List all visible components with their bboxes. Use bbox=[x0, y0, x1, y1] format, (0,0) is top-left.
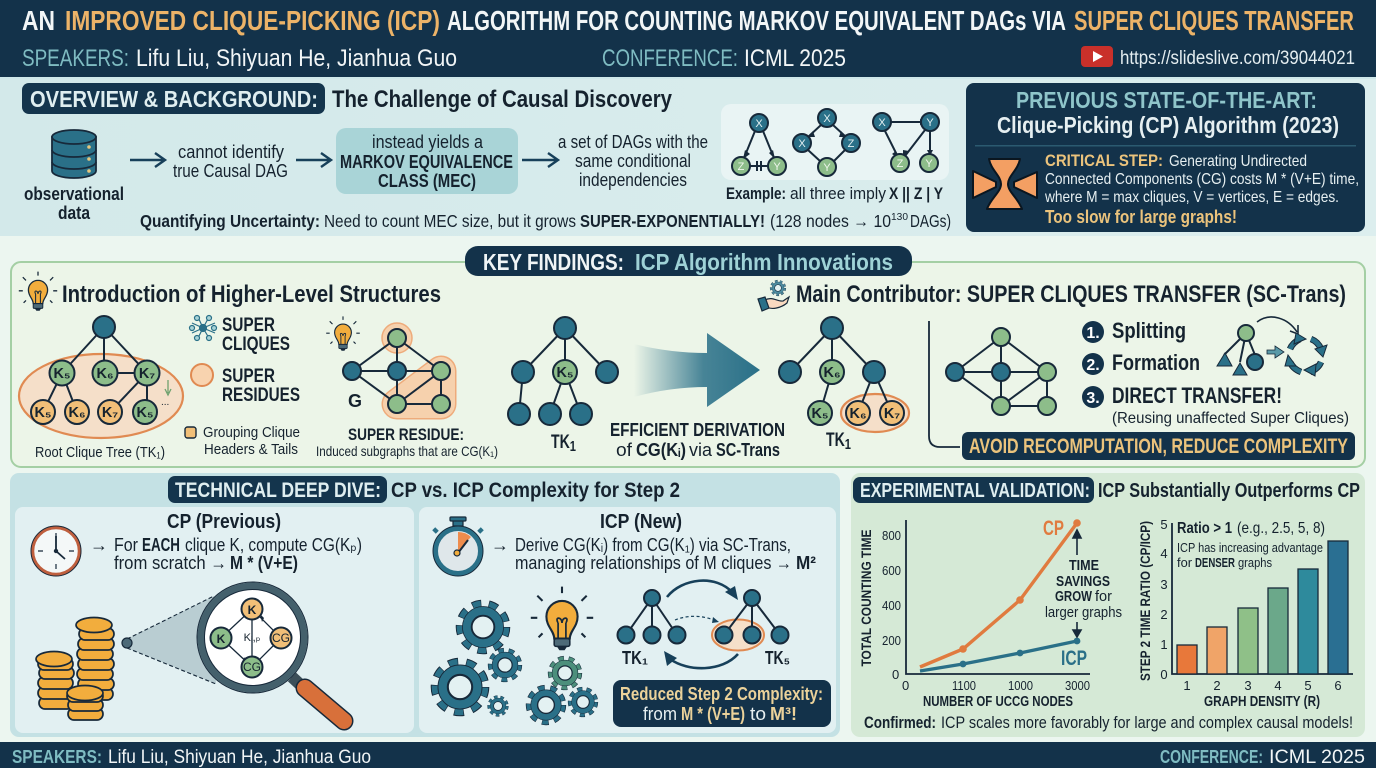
line chart: total counting time: 0 bbox=[892, 667, 899, 682]
diagram: graph after transfer bbox=[946, 328, 1056, 415]
heading: key findings: KEY FINDINGS: bbox=[483, 249, 624, 275]
text: set of DAGs: independencies bbox=[579, 170, 687, 190]
step 2: formation: 2. bbox=[1086, 357, 1100, 374]
bar chart: step 2 time ratio bbox=[1137, 517, 1353, 710]
arrow bbox=[522, 153, 558, 167]
text: quantifying uncertainty: (128 nodes → 10 bbox=[770, 211, 891, 231]
diagram: root clique tree: K₅ bbox=[53, 366, 71, 382]
callout: reduced complexity: to bbox=[750, 704, 766, 724]
text: critical step: Generating Undirected bbox=[1169, 153, 1307, 170]
step 2: formation: Formation bbox=[1112, 350, 1200, 375]
icon: magnifying glass with clique graph: K bbox=[248, 603, 257, 617]
panel: example DAGs: Y bbox=[926, 117, 934, 129]
text: quantifying uncertainty: SUPER-EXPONENTIALLY! bbox=[580, 211, 765, 231]
header banner bbox=[0, 0, 1376, 79]
line chart: total counting time: TIME bbox=[1069, 558, 1099, 574]
box: markov equivalence class: instead yields a bbox=[372, 132, 484, 152]
text: quantifying uncertainty: Need to count MEC size, but it grows bbox=[324, 211, 576, 231]
title: ALGORITHM FOR COUNTING MARKOV EQUIVALENT DAGs VIA bbox=[447, 5, 1066, 36]
panel: example DAGs: Y bbox=[925, 158, 933, 170]
conference line: CONFERENCE: bbox=[602, 45, 738, 72]
panel: ICP new bbox=[419, 507, 836, 733]
line chart: total counting time: TOTAL COUNTING TIME bbox=[858, 530, 874, 666]
callout: reduced complexity: from bbox=[643, 704, 677, 724]
bar chart: step 2 time ratio: STEP 2 TIME RATIO (CP/ICP) bbox=[1137, 521, 1153, 681]
bar chart: step 2 time ratio: 4 bbox=[1160, 546, 1168, 561]
icon: magnifying glass with clique graph: CG bbox=[272, 631, 290, 645]
text: set of DAGs bbox=[558, 132, 708, 190]
speakers line: Lifu Liu, Shiyuan He, Jianhua Guo bbox=[136, 45, 457, 72]
caption: root clique tree: Root Clique Tree (TK₁) bbox=[35, 444, 165, 461]
line chart: total counting time: CP bbox=[1043, 517, 1064, 540]
panel: example DAGs: Z bbox=[738, 161, 745, 173]
diagram: tree TK1 before: TK bbox=[551, 432, 576, 453]
text: CP description: → bbox=[90, 535, 108, 555]
bar chart: step 2 time ratio: 3 bbox=[1244, 678, 1252, 693]
panel: example DAGs: Y bbox=[823, 162, 831, 174]
line chart: total counting time: 400 bbox=[882, 598, 901, 613]
legend: super cliques: CLIQUES bbox=[222, 334, 290, 355]
footer banner bbox=[0, 742, 1376, 768]
caption: super residue bbox=[316, 425, 498, 459]
text: ICP description: M² bbox=[796, 553, 816, 573]
line chart: total counting time: larger graphs bbox=[1045, 605, 1122, 621]
arrow: efficient transfer bbox=[634, 333, 760, 407]
caption: example: all three imply bbox=[790, 184, 886, 203]
heading: CP previous: CP (Previous) bbox=[167, 511, 281, 533]
text: cannot identify: true Causal DAG bbox=[173, 161, 288, 181]
line chart: total counting time: SAVINGS bbox=[1056, 574, 1110, 590]
diagram: TK1 to TK5 transfer bbox=[618, 581, 790, 668]
conference line: ICML 2025 bbox=[744, 45, 846, 72]
bar chart: step 2 time ratio: 5 bbox=[1304, 678, 1312, 693]
panel: experimental validation bbox=[851, 473, 1365, 737]
panel: example DAGs: X bbox=[823, 113, 831, 125]
icon: coin stacks bbox=[36, 618, 114, 720]
heading: experimental validation bbox=[853, 477, 1360, 503]
step 2: formation bbox=[1082, 350, 1200, 375]
bar chart: step 2 time ratio: 5 bbox=[1160, 517, 1168, 532]
icon: database bbox=[52, 130, 96, 178]
text: efficient derivation: EFFICIENT DERIVATION bbox=[610, 420, 785, 440]
diagram: tree TK1 after: K₆ bbox=[823, 365, 841, 381]
step 3: direct transfer: 3. bbox=[1086, 390, 1100, 407]
legend: grouping clique headers and tails: Grouping Clique bbox=[203, 424, 300, 441]
text: CP description: M * (V+E) bbox=[230, 553, 298, 573]
label: observational data: data bbox=[58, 203, 91, 223]
text: CP description: clique K, compute CG(Kₚ) bbox=[185, 535, 362, 555]
text: ICP description: Derive CG(Kᵢ) from CG(K₁) via SC-Trans, bbox=[515, 535, 791, 555]
text: efficient derivation bbox=[610, 420, 785, 460]
panel: example DAGs: X bbox=[798, 138, 806, 150]
icon: magnifying glass with clique graph: Kᵢ,ₚ bbox=[244, 632, 261, 644]
bar chart: step 2 time ratio: 1 bbox=[1160, 637, 1168, 652]
panel: example DAGs: X bbox=[878, 117, 886, 129]
icon: super cliques network bbox=[190, 316, 216, 340]
step 3: direct transfer: DIRECT TRANSFER! bbox=[1112, 383, 1282, 408]
bar chart: step 2 time ratio: for bbox=[1177, 555, 1193, 570]
bar chart: step 2 time ratio: DENSER bbox=[1195, 555, 1235, 570]
line chart: total counting time: ICP bbox=[1061, 647, 1087, 670]
text: CP description: For bbox=[114, 535, 138, 555]
text: cannot identify: cannot identify bbox=[178, 142, 284, 162]
text: efficient derivation: SC-Trans bbox=[716, 440, 780, 460]
diagram: root clique tree: K₇ bbox=[102, 405, 118, 421]
diagram: tree TK1 after: K₅ bbox=[811, 406, 829, 422]
text: set of DAGs: a set of DAGs with the bbox=[558, 132, 708, 152]
callout: reduced complexity: M³! bbox=[770, 704, 797, 724]
text: ICP description: → bbox=[491, 535, 509, 555]
text: efficient derivation: via bbox=[689, 440, 713, 460]
text: CP description: from scratch → bbox=[114, 553, 227, 573]
line chart: total counting time: 600 bbox=[882, 563, 901, 578]
icon: light bulb bbox=[326, 316, 360, 351]
panel: example DAGs: X bbox=[755, 118, 763, 130]
icon: light bulb bbox=[531, 587, 593, 650]
legend: super residues: SUPER bbox=[222, 366, 275, 387]
caption: example: Example: bbox=[726, 184, 786, 203]
heading: overview bbox=[22, 83, 673, 114]
title: IMPROVED CLIQUE-PICKING (ICP) bbox=[65, 5, 440, 36]
icon: split and recycle bbox=[1217, 317, 1327, 376]
diagram: tree TK1 after bbox=[779, 317, 909, 453]
text: ICP description: managing relationships of M cliques → bbox=[515, 553, 792, 573]
diagram: tree TK1 before: 1 bbox=[570, 438, 576, 455]
heading: overview: The Challenge of Causal Discovery bbox=[332, 86, 673, 113]
text: quantifying uncertainty bbox=[140, 211, 951, 231]
title: AN bbox=[22, 5, 55, 36]
line chart: total counting time: 0 bbox=[902, 678, 909, 693]
line chart: total counting time: GROW bbox=[1055, 589, 1092, 605]
icon: magnifying glass with clique graph: K bbox=[217, 632, 226, 646]
footer banner: CONFERENCE: bbox=[1160, 747, 1263, 767]
bar chart: step 2 time ratio: 1 bbox=[1183, 678, 1191, 693]
heading: key findings: ICP Algorithm Innovations bbox=[635, 249, 893, 275]
legend: super cliques bbox=[222, 315, 290, 355]
heading: overview: OVERVIEW & BACKGROUND: bbox=[30, 86, 318, 112]
heading: technical deep dive: TECHNICAL DEEP DIVE: bbox=[175, 479, 381, 502]
text: critical step: CRITICAL STEP: bbox=[1045, 151, 1163, 170]
diagram: root clique tree: K₅ bbox=[136, 405, 154, 421]
icon: hand holding gear bbox=[758, 281, 789, 311]
diagram: graph G with super residues bbox=[343, 323, 450, 413]
diagram: root clique tree bbox=[19, 316, 183, 438]
line chart: total counting time: 200 bbox=[882, 633, 901, 648]
text: CP description: EACH bbox=[142, 535, 180, 555]
speakers line bbox=[22, 45, 457, 72]
panel: example DAGs: Z bbox=[897, 158, 904, 170]
label: observational data: observational bbox=[24, 184, 124, 204]
diagram: tree TK1 before: K₅ bbox=[556, 365, 574, 381]
legend: grouping clique headers and tails: Headers & Tails bbox=[204, 441, 298, 458]
box: markov equivalence class: CLASS (MEC) bbox=[378, 171, 476, 191]
line chart: total counting time: for bbox=[1095, 589, 1112, 605]
heading: technical deep dive: CP vs. ICP Complexity for Step 2 bbox=[391, 479, 680, 502]
footer banner: ICML 2025 bbox=[1269, 747, 1365, 768]
panel: example DAGs bbox=[721, 104, 949, 180]
legend: super residues bbox=[222, 366, 300, 406]
callout: reduced complexity: Reduced Step 2 Complexity: bbox=[620, 684, 823, 704]
bar chart: step 2 time ratio: 0 bbox=[1160, 667, 1168, 682]
line chart: total counting time: 3000 bbox=[1065, 678, 1090, 693]
legend: super residues: RESIDUES bbox=[222, 385, 300, 406]
diagram: root clique tree: ... bbox=[161, 397, 169, 408]
step 1: splitting bbox=[1082, 318, 1186, 343]
legend: super cliques: SUPER bbox=[222, 315, 275, 336]
diagram: tree TK1 after: K₆ bbox=[849, 406, 867, 422]
icon: light bulb bbox=[19, 272, 57, 311]
icon: clock bbox=[31, 526, 81, 576]
caption: super residue: Induced subgraphs that are CG(K₁) bbox=[316, 443, 498, 459]
heading: higher-level structures: Introduction of Higher-Level Structures bbox=[62, 281, 441, 308]
panel: overview and background bbox=[0, 79, 1376, 236]
bar chart: step 2 time ratio: 2 bbox=[1213, 678, 1221, 693]
text: critical step: Too slow for large graphs! bbox=[1045, 207, 1237, 227]
diagram: tree TK1 after: 1 bbox=[845, 436, 851, 453]
line chart: total counting time bbox=[858, 517, 1122, 710]
diagram: tree TK1 before bbox=[508, 317, 618, 455]
arrow bbox=[296, 153, 331, 167]
bar chart: step 2 time ratio: GRAPH DENSITY (R) bbox=[1204, 694, 1320, 710]
bar chart: step 2 time ratio: 6 bbox=[1334, 678, 1342, 693]
icon: gears bbox=[436, 605, 595, 721]
bar chart: step 2 time ratio: 2 bbox=[1160, 607, 1168, 622]
text: efficient derivation: CG(Kᵢ) bbox=[636, 440, 686, 460]
icon: video play bbox=[1081, 46, 1113, 67]
diagram: root clique tree: K₆ bbox=[96, 366, 114, 382]
icon: magnifying glass with clique graph bbox=[197, 582, 344, 721]
panel: previous state of the art: PREVIOUS STATE-OF-THE-ART: bbox=[1016, 87, 1317, 113]
step 3: direct transfer: (Reusing unaffected Super Cliques) bbox=[1112, 410, 1349, 427]
bar chart: step 2 time ratio: Ratio > 1 bbox=[1177, 520, 1232, 537]
diagram: root clique tree: K₅ bbox=[34, 405, 52, 421]
step 3: direct transfer bbox=[1082, 383, 1349, 427]
line chart: total counting time: 800 bbox=[882, 528, 901, 543]
diagram: root clique tree: K₇ bbox=[139, 366, 155, 382]
heading: ICP new: ICP (New) bbox=[600, 511, 682, 533]
heading: key findings bbox=[465, 246, 912, 276]
panel: example DAGs: Y bbox=[773, 161, 781, 173]
footer banner: Lifu Liu, Shiyuan He, Jianhua Guo bbox=[108, 747, 371, 768]
line chart: total counting time: NUMBER OF UCCG NODES bbox=[923, 694, 1073, 710]
panel: technical deep dive bbox=[10, 473, 840, 737]
icon: hourglass bottleneck bbox=[973, 159, 1037, 209]
icon: magnifying glass with clique graph: CG bbox=[243, 660, 261, 674]
text: quantifying uncertainty: 130 bbox=[891, 212, 908, 223]
zoom cone bbox=[122, 596, 216, 684]
label: observational data bbox=[24, 184, 124, 223]
diagram: TK1 to TK5 transfer: TK₅ bbox=[765, 648, 790, 668]
diagram: tree TK1 after: TK bbox=[826, 430, 851, 451]
text: set of DAGs: same conditional bbox=[575, 151, 691, 171]
panel: example DAGs: Z bbox=[848, 138, 855, 150]
text: CP description bbox=[90, 535, 362, 573]
conclusion text: Confirmed: bbox=[864, 713, 936, 732]
bar chart: step 2 time ratio: (e.g., 2.5, 5, 8) bbox=[1237, 520, 1325, 537]
line chart: total counting time: 1000 bbox=[1008, 678, 1033, 693]
heading: experimental validation: EXPERIMENTAL VALIDATION: bbox=[860, 480, 1090, 502]
diagram: graph G with super residues: G bbox=[348, 391, 362, 411]
speakers line: SPEAKERS: bbox=[22, 45, 129, 72]
callout: reduced complexity bbox=[613, 680, 831, 727]
heading: technical deep dive bbox=[168, 476, 680, 503]
icon: stopwatch bbox=[433, 517, 483, 576]
line chart: total counting time: 1100 bbox=[952, 678, 976, 693]
box: markov equivalence class: MARKOV EQUIVALENCE bbox=[340, 152, 513, 172]
text: quantifying uncertainty: Quantifying Uncertainty: bbox=[140, 211, 320, 231]
diagram: root clique tree: K₆ bbox=[68, 405, 86, 421]
text: cannot identify bbox=[173, 142, 288, 181]
arrow bbox=[130, 153, 165, 167]
icon: super residue circle bbox=[191, 364, 213, 386]
footer banner: SPEAKERS: bbox=[12, 747, 102, 767]
bar chart: step 2 time ratio: 3 bbox=[1160, 577, 1168, 592]
panel: key findings bbox=[11, 246, 1365, 467]
text: quantifying uncertainty: DAGs) bbox=[910, 211, 951, 231]
box: markov equivalence class bbox=[336, 128, 518, 194]
diagram: tree TK1 after: K₇ bbox=[884, 406, 900, 422]
bar chart: step 2 time ratio: graphs bbox=[1238, 555, 1272, 570]
caption: example: X || Z | Y bbox=[889, 184, 944, 203]
diagram: TK1 to TK5 transfer: TK₁ bbox=[622, 648, 648, 668]
text: ICP description bbox=[491, 535, 816, 573]
legend: grouping clique headers and tails bbox=[185, 424, 300, 458]
panel: previous state of the art bbox=[966, 83, 1365, 232]
caption: example bbox=[726, 184, 944, 203]
text: efficient derivation: of bbox=[616, 440, 633, 460]
text: critical step bbox=[1044, 151, 1359, 227]
step 1: splitting: 1. bbox=[1086, 325, 1100, 342]
caption: super residue: SUPER RESIDUE: bbox=[348, 425, 464, 444]
panel: CP previous bbox=[15, 507, 414, 733]
callout: reduced complexity: M * (V+E) bbox=[681, 704, 745, 724]
title bbox=[22, 5, 1354, 36]
step 1: splitting: Splitting bbox=[1112, 318, 1186, 343]
bar chart: step 2 time ratio: ICP has increasing advantage bbox=[1177, 540, 1323, 555]
connector line to callout bbox=[929, 321, 960, 447]
bar chart: step 2 time ratio: 4 bbox=[1274, 678, 1282, 693]
